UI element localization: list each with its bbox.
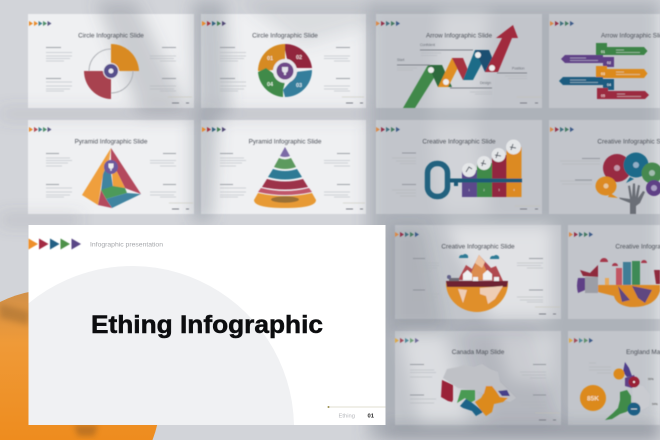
title: creative globe slide: Creative Infographic Slide xyxy=(441,244,515,250)
footer: line, brand and page number xyxy=(328,406,386,420)
chart: circle slide 2 xyxy=(258,44,312,97)
chart: key and bars xyxy=(428,140,522,197)
grey circle decoration xyxy=(28,266,294,425)
chart: mountain and globe bowl xyxy=(446,254,508,312)
panel: creative hand slide xyxy=(549,120,660,214)
title: circle slide 2: Circle Infographic Slide xyxy=(252,32,318,40)
panel: creative city slide xyxy=(568,225,660,319)
footer: line, brand and page number: 01 xyxy=(368,414,375,420)
text notes: circle slide 2 xyxy=(220,52,350,91)
chart: arrow banners: 04 xyxy=(607,83,611,87)
chart: circle slide 2: 02 xyxy=(296,55,302,61)
text notes: circle slide 1 xyxy=(46,52,176,91)
panel: arrow slide 1 xyxy=(376,14,542,108)
panel: creative globe slide xyxy=(395,225,561,319)
header arrows: key slide xyxy=(376,127,380,132)
chart: key and bars: 4 xyxy=(513,188,515,192)
header arrows: canada slide xyxy=(395,338,399,343)
title: circle slide 1: Circle Infographic Slide xyxy=(78,32,144,40)
title: pyramid slide 2: Pyramid Infographic Slide xyxy=(249,138,322,146)
chart: england map xyxy=(580,362,650,420)
text notes: pyramid slide 1 xyxy=(46,158,176,197)
labels: england slide xyxy=(589,363,658,406)
chart: circle slide 2: 04 xyxy=(267,82,274,88)
panel: main title slide xyxy=(28,225,386,425)
text notes: hand slide xyxy=(560,161,600,184)
slide footers xyxy=(168,97,560,420)
header arrows: main slide xyxy=(28,238,81,250)
labels: arrow slide 1: Confident xyxy=(420,43,435,47)
title: canada map slide: Canada Map Slide xyxy=(452,349,505,356)
panel: canada map slide xyxy=(395,331,561,425)
chart: hand and speech bubbles xyxy=(596,152,660,214)
panel: england map slide xyxy=(568,331,660,425)
text notes: key slide xyxy=(392,158,416,196)
header arrows: hand slide xyxy=(550,127,554,132)
chart: england map: 85K xyxy=(587,396,599,402)
panel: circle slide 1 xyxy=(28,14,194,108)
chart: key and bars: 1 xyxy=(468,188,470,192)
header arrows: slide 1 xyxy=(29,21,38,26)
header arrows: slide 2 xyxy=(202,21,206,26)
chart: arrow banners: 02 xyxy=(607,61,611,65)
chart: circle slide 1 xyxy=(84,44,139,99)
chart: circle slide 2: 03 xyxy=(296,83,302,89)
panel: arrow slide 2 xyxy=(549,14,660,108)
chart: zigzag arrow xyxy=(403,25,518,108)
chart: key and bars: 2 xyxy=(483,188,485,192)
text notes: canada slide xyxy=(410,370,546,408)
labels: arrow slide 1: Design xyxy=(480,81,491,85)
text notes: pyramid slide 2 xyxy=(220,158,350,197)
labels: arrow slide 1: Position xyxy=(512,66,525,70)
header arrows: england slide xyxy=(569,338,573,343)
header arrows: slide 4 xyxy=(550,21,554,26)
header arrows: slide 3 xyxy=(376,21,380,26)
header arrows: city slide xyxy=(569,232,573,237)
footer: line, brand and page number: Ething xyxy=(338,414,355,420)
chart: canada map xyxy=(441,364,516,416)
chart: city on globe xyxy=(577,258,660,307)
panel: circle slide 2 xyxy=(201,14,366,108)
chart: key and bars: 3 xyxy=(498,188,500,192)
title: arrow slide 1: Arrow Infographic Slide xyxy=(426,32,492,40)
title: ething infographic: Ething Infographic xyxy=(91,311,323,339)
labels: england slide: 54% xyxy=(652,402,658,406)
chart: pyramid xyxy=(82,148,141,208)
orange circle behind main slide xyxy=(0,290,160,440)
subtitle: infographic presentation: Infographic presentation xyxy=(90,242,163,248)
chart: layered cone xyxy=(254,147,316,208)
labels: arrow slide 1: Start xyxy=(397,58,404,62)
panel: pyramid slide 2 xyxy=(201,120,366,214)
panel: creative key slide xyxy=(376,120,542,214)
header arrows: globe slide xyxy=(395,232,399,237)
header arrows: pyramid 1 xyxy=(29,127,33,132)
title: creative key slide: Creative Infographic Slide xyxy=(422,138,496,146)
chart: arrow banners: 03 xyxy=(601,72,605,76)
chart: arrow banners: 05 xyxy=(601,94,605,98)
chart: arrow banners xyxy=(559,43,649,99)
text notes: globe slide xyxy=(413,263,543,302)
labels: arrow slide 1 xyxy=(397,43,527,94)
title: pyramid slide 1: Pyramid Infographic Slide xyxy=(75,138,148,146)
chart: circle slide 2: 01 xyxy=(267,56,273,62)
header arrows: pyramid 2 xyxy=(202,127,206,132)
chart: arrow banners: 01 xyxy=(601,50,605,54)
labels: england slide: 50% xyxy=(648,377,654,381)
panel: pyramid slide 1 xyxy=(28,120,194,214)
